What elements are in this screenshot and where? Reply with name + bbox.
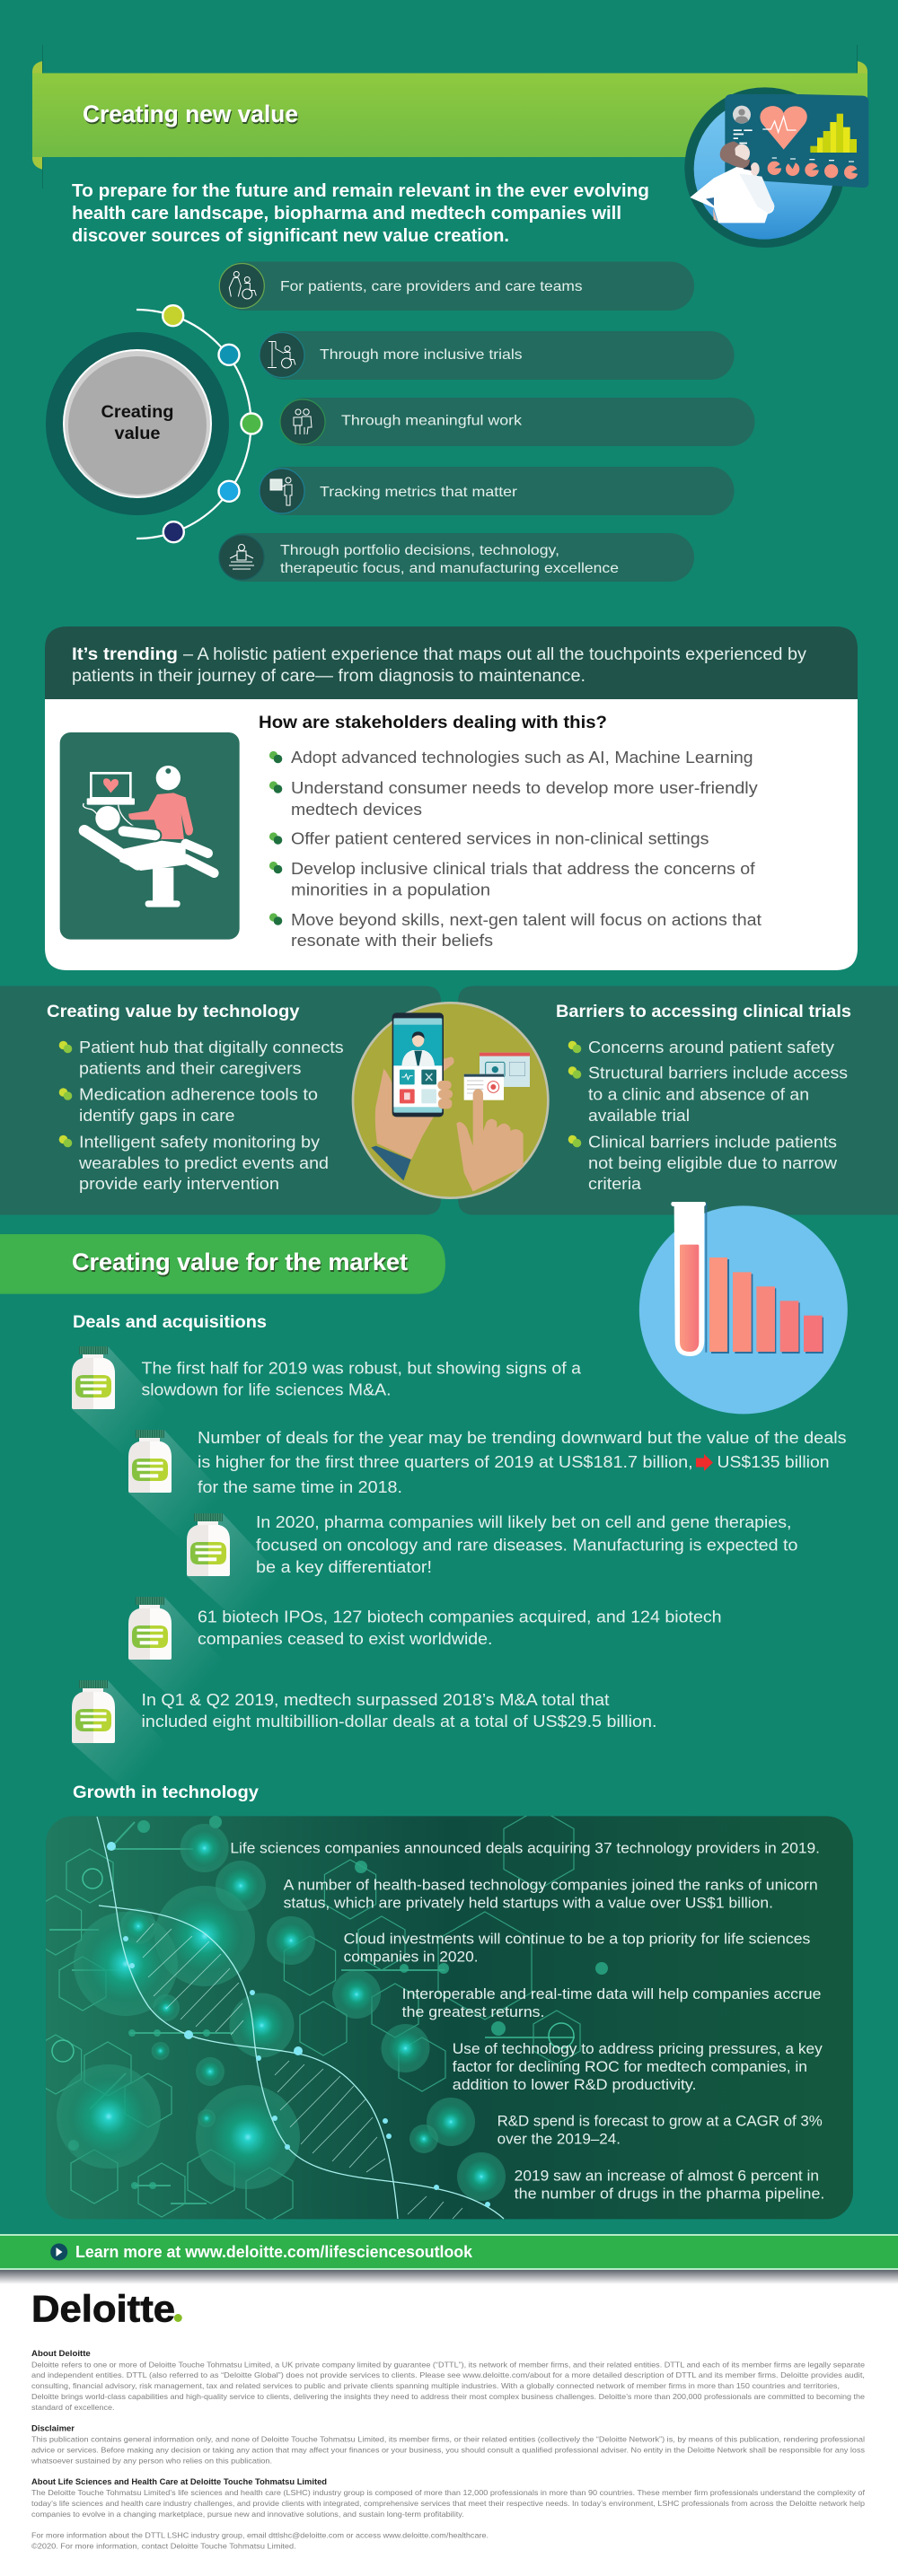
- technology list: identify gaps in care: [79, 1107, 235, 1125]
- icon: pill bottle: [128, 1597, 229, 1715]
- trending statement: – A holistic patient experience that maps out all the touchpoints experienced by: [183, 645, 807, 664]
- barriers list: available trial: [588, 1107, 690, 1125]
- technology points: over the 2019–24.: [497, 2131, 621, 2147]
- technology list: provide early intervention: [79, 1175, 279, 1193]
- diagram: creating value hub: Creating: [101, 403, 174, 422]
- barriers list: Clinical barriers include patients: [588, 1133, 837, 1151]
- barriers list: not being eligible due to narrow: [588, 1154, 838, 1172]
- panel: it's trending: [45, 626, 858, 970]
- call to action bar: [0, 2234, 898, 2270]
- stakeholder list: minorities in a population: [291, 881, 490, 899]
- stakeholder list: [269, 749, 762, 950]
- about Deloitte: [31, 2349, 865, 2412]
- technology list: patients and their caregivers: [79, 1059, 302, 1077]
- icon: arrow button: [50, 2244, 67, 2260]
- pill: patients and care teams: [219, 262, 694, 311]
- contact and copyright: For more information about the DTTL LSHC industry group, email dttlshc@deloitte.com or access www.deloitte.com/healthcare.: [31, 2531, 489, 2540]
- technology points: companies in 2020.: [344, 1948, 479, 1966]
- icon: pill bottle: [72, 1680, 172, 1799]
- Deloitte logo: Deloitte: [31, 2288, 175, 2330]
- deal 1: slowdown for life sciences M&A.: [142, 1380, 392, 1398]
- heading: growth in technology: Growth in technology: [73, 1783, 259, 1802]
- deal 4: companies ceased to exist worldwide.: [198, 1630, 492, 1648]
- deal 3: In 2020, pharma companies will likely bet on cell and gene therapies,: [256, 1513, 791, 1531]
- deal 1: [72, 1346, 582, 1465]
- deal 1: The first half for 2019 was robust, but showing signs of a: [142, 1359, 582, 1377]
- disclaimer: Disclaimer: [31, 2423, 75, 2432]
- technology points: 2019 saw an increase of almost 6 percent in: [515, 2167, 819, 2185]
- stakeholder list: resonate with their beliefs: [291, 932, 493, 950]
- pill: inclusive trials: Through more inclusive trials: [320, 347, 523, 363]
- heading: deals and acquisitions: Deals and acquisitions: [73, 1313, 267, 1332]
- heading: creating new value: Creating new value: [83, 101, 298, 127]
- diagram: creating value hub: [46, 305, 262, 542]
- about life sciences and health care: The Deloitte Touche Tohmatsu Limited’s life sciences and health care (LSHC) industry group is composed of more than 12,000 professionals in more than 90 countries. These member firm professionals understand the complexity of: [31, 2488, 866, 2497]
- about Deloitte: Deloitte brings world-class capabilities and high-quality service to clients, delivering the insights they need to address their most complex business challenges. Deloitte’s more than 200,000 professionals are committed to becoming the: [31, 2392, 865, 2401]
- barriers list: Structural barriers include access: [588, 1065, 848, 1082]
- pill: portfolio decisions: therapeutic focus, and manufacturing excellence: [280, 561, 619, 576]
- technology list: Patient hub that digitally connects: [79, 1038, 344, 1056]
- section banner: creating value for the market: Creating value for the market: [72, 1249, 408, 1275]
- technology list: Intelligent safety monitoring by: [79, 1133, 320, 1151]
- icon: doctor with patient: [60, 732, 240, 940]
- about Deloitte: and independent entities. DTTL (also referred to as “Deloitte Global”) does not provide services to clients. Please see www.deloitte.com/about for a more detailed description of DTTL and its member firms. Deloitte provides audit,: [31, 2370, 865, 2379]
- intro text: To prepare for the future and remain relevant in the ever evolving: [72, 181, 649, 201]
- deal 3: be a key differentiator!: [256, 1558, 432, 1576]
- deal 2: Number of deals for the year may be trending downward but the value of the deals: [198, 1429, 847, 1447]
- banner: creating new value: [32, 45, 867, 188]
- technology list: Medication adherence tools to: [79, 1086, 318, 1104]
- technology points: Life sciences companies announced deals acquiring 37 technology providers in 2019.: [230, 1840, 820, 1856]
- technology points: A number of health-based technology companies joined the ranks of unicorn: [284, 1876, 818, 1894]
- icon: caregiver and wheelchair: [219, 264, 264, 309]
- disclaimer: whatsoever sustained by any person who relies on this publication.: [31, 2456, 272, 2465]
- icon: two colleagues: [280, 399, 325, 444]
- panel: barriers to accessing clinical trials: [458, 986, 898, 1215]
- heading: technology: Creating value by technology: [47, 1003, 300, 1021]
- deal 2: [128, 1429, 847, 1548]
- deal 4: 61 biotech IPOs, 127 biotech companies acquired, and 124 biotech: [198, 1608, 722, 1626]
- deal 4: [128, 1597, 722, 1715]
- icon: pill bottle: [128, 1430, 229, 1548]
- technology points: status, which are privately held startups with a value over US$1 billion.: [284, 1894, 773, 1912]
- technology points: [230, 1840, 824, 2203]
- about life sciences and health care: About Life Sciences and Health Care at Deloitte Touche Tohmatsu Limited: [31, 2477, 327, 2486]
- stakeholder list: Move beyond skills, next-gen talent will focus on actions that: [291, 911, 762, 929]
- heading: barriers: Barriers to accessing clinical trials: [556, 1003, 851, 1021]
- deal 3: focused on oncology and rare diseases. Manufacturing is expected to: [256, 1537, 797, 1555]
- pill: meaningful work: [280, 398, 754, 446]
- deal 5: included eight multibillion-dollar deals at a total of US$29.5 billion.: [142, 1713, 657, 1730]
- stakeholder list: Understand consumer needs to develop more user-friendly: [291, 779, 758, 797]
- intro text: health care landscape, biopharma and medtech companies will: [72, 204, 621, 223]
- footer shadow: [0, 2270, 898, 2284]
- pill: patients and care teams: For patients, care providers and care teams: [280, 279, 583, 294]
- stakeholder list: Develop inclusive clinical trials that address the concerns of: [291, 860, 756, 878]
- technology points: R&D spend is forecast to grow at a CAGR of 3%: [497, 2113, 823, 2129]
- barriers list: Concerns around patient safety: [588, 1038, 834, 1056]
- technology points: the number of drugs in the pharma pipeline.: [515, 2185, 824, 2203]
- disclaimer: This publication contains general information only, and none of Deloitte Touche Tohmatsu Limited, its member firms, or their related entities (collectively the “Deloitte Network”) is, by means of this publication, rendering professional: [31, 2435, 865, 2444]
- contact and copyright: ©2020. For more information, contact Deloitte Touche Tohmatsu Limited.: [31, 2542, 296, 2551]
- about Deloitte: consulting, financial advisory, risk management, tax and related services to public and private clients spanning multiple industries. With a globally connected network of member firms in more than 150 countries and territories,: [31, 2381, 840, 2390]
- deal 2: US$135 billion: [717, 1453, 830, 1471]
- pill: tracking metrics: Tracking metrics that matter: [320, 485, 518, 500]
- technology list: [59, 1038, 344, 1193]
- about life sciences and health care: companies to evolve in a changing marketplace, pursue new and innovative solutions, and sustain long-term profitability.: [31, 2510, 464, 2519]
- stakeholder list: Offer patient centered services in non-clinical settings: [291, 829, 709, 847]
- technology points: Interoperable and real-time data will help companies accrue: [402, 1985, 821, 2002]
- deal 2: for the same time in 2018.: [198, 1478, 402, 1496]
- pill: portfolio decisions: Through portfolio decisions, technology,: [280, 543, 559, 558]
- about Deloitte: Deloitte refers to one or more of Deloitte Touche Tohmatsu Limited, a UK private company limited by guarantee (“DTTL”), its network of member firms, and their related entities. DTTL and each of its member firms are legally separate: [31, 2360, 865, 2369]
- diagram: creating value hub: value: [115, 425, 160, 443]
- DNA and molecular network artwork: [30, 1809, 608, 2221]
- disclaimer: advice or services. Before making any decision or taking any action that may affect your finances or your business, you should consult a qualified professional adviser. No entity in the Deloitte Network shall be responsible for any loss: [31, 2445, 865, 2454]
- about life sciences and health care: today’s life sciences and health care industry challenges, and provide clients with integrated, comprehensive services that meet their respective needs. In today’s environment, LSHC professionals from across the Deloitte network help: [31, 2499, 865, 2508]
- panel: creating value by technology: [0, 986, 441, 1215]
- deal 5: [72, 1680, 657, 1799]
- icon: pill bottle: [72, 1346, 172, 1465]
- barriers list: [568, 1038, 848, 1193]
- icon: pill bottle: [187, 1513, 287, 1632]
- deal 2: is higher for the first three quarters of 2019 at US$181.7 billion,: [198, 1453, 693, 1471]
- trending statement: It’s trending: [72, 645, 178, 664]
- illustration: doctor studying dashboard: [684, 87, 868, 248]
- about Deloitte: About Deloitte: [31, 2349, 91, 2358]
- intro text: discover sources of significant new value creation.: [72, 226, 509, 246]
- barriers list: to a clinic and absence of an: [588, 1086, 809, 1104]
- stakeholder list: Adopt advanced technologies such as AI, Machine Learning: [291, 749, 753, 767]
- about life sciences and health care: [31, 2477, 866, 2519]
- technology list: wearables to predict events and: [78, 1154, 329, 1172]
- icon: IV stand and patient: [260, 332, 304, 377]
- contact and copyright: [31, 2531, 489, 2551]
- panel: growth in technology: [30, 1809, 853, 2221]
- illustration: test tube and declining bars: [639, 1202, 848, 1414]
- section banner: creating value for the market: [0, 1234, 445, 1294]
- icon: presenter at board: [260, 469, 304, 513]
- icon: seated figure: [219, 535, 264, 580]
- trending statement: [72, 645, 807, 686]
- icon: red arrow: [696, 1454, 713, 1471]
- illustration: phone health app: [353, 1003, 548, 1198]
- deal 5: In Q1 & Q2 2019, medtech surpassed 2018’s M&A total that: [142, 1691, 609, 1709]
- stakeholder list: medtech devices: [291, 801, 422, 819]
- pill: tracking metrics: [260, 467, 735, 515]
- call to action bar: Learn more at www.deloitte.com/lifesciencesoutlook: [75, 2243, 473, 2261]
- disclaimer: [31, 2423, 865, 2465]
- technology points: Use of technology to address pricing pressures, a key: [453, 2040, 823, 2057]
- technology points: addition to lower R&D productivity.: [453, 2076, 697, 2093]
- pill: portfolio decisions: [219, 533, 694, 582]
- technology points: the greatest returns.: [402, 2003, 544, 2020]
- heading: how are stakeholders dealing with this: How are stakeholders dealing with this?: [259, 714, 607, 732]
- pill: inclusive trials: [260, 331, 735, 380]
- about Deloitte: standard of excellence.: [31, 2403, 115, 2412]
- pill: meaningful work: Through meaningful work: [341, 413, 523, 429]
- technology points: Cloud investments will continue to be a top priority for life sciences: [344, 1930, 810, 1948]
- technology points: factor for declining ROC for medtech companies, in: [453, 2058, 807, 2075]
- trending statement: patients in their journey of care— from diagnosis to maintenance.: [72, 667, 585, 686]
- intro text: [72, 181, 649, 246]
- barriers list: criteria: [588, 1175, 642, 1193]
- deal 3: [187, 1513, 797, 1632]
